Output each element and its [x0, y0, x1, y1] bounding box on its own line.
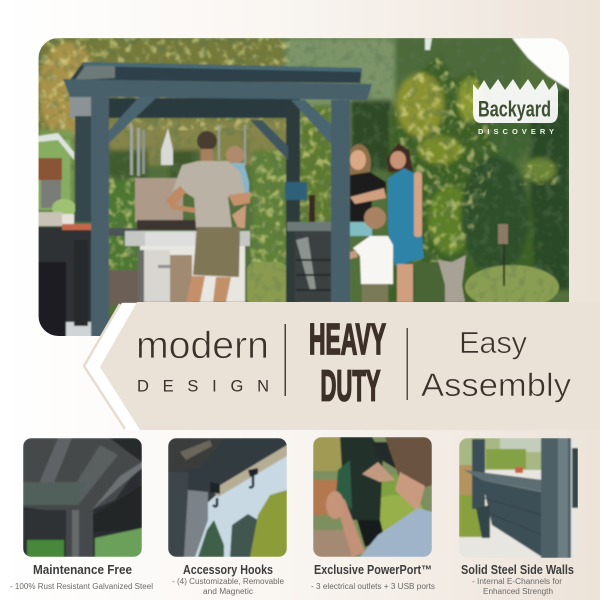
photo: maintenance free roof [23, 438, 142, 557]
chevron outline [84, 303, 140, 430]
divider [284, 324, 286, 396]
caption: accessory hooks: - (4) Customizable, Removable [172, 577, 285, 586]
heavy duty: DUTY [320, 362, 380, 410]
caption: exclusive powerport [311, 563, 435, 591]
woman in blue dress [387, 143, 424, 302]
caption: accessory hooks: Accessory Hooks [183, 563, 273, 577]
outdoor kitchen counter [38, 226, 92, 322]
caption: solid steel side walls: - Internal E-Channels for [472, 577, 562, 586]
easy assembly: Easy [459, 325, 528, 360]
modern design [136, 325, 269, 396]
foliage texture [38, 38, 560, 270]
grill [125, 178, 250, 305]
caption: accessory hooks: and Magnetic [203, 587, 253, 596]
heavy duty [309, 315, 386, 410]
easy assembly: Assembly [421, 367, 571, 403]
hooks [213, 472, 253, 506]
modern design: DESIGN [137, 378, 269, 396]
caption: maintenance free: Maintenance Free [33, 563, 132, 577]
caption: maintenance free: - 100% Rust Resistant Galvanized Steel [10, 582, 153, 591]
divider [406, 328, 408, 400]
background trees [38, 38, 520, 270]
tiki torch [498, 224, 508, 286]
photo: PowerPort [313, 437, 432, 557]
statue [438, 255, 466, 302]
logo: Backyard Discovery [473, 79, 558, 136]
plants and flowers left [38, 140, 70, 210]
lantern and hanging bars [130, 125, 246, 176]
modern design: modern [136, 325, 269, 367]
banner with feature words [84, 302, 600, 430]
man with child [166, 131, 250, 302]
caption: solid steel side walls [461, 563, 574, 596]
boy [348, 206, 394, 302]
sky [512, 38, 570, 90]
conifers [388, 55, 570, 302]
logo: Backyard Discovery: Backyard [478, 96, 551, 122]
caption: maintenance free [10, 563, 153, 591]
caption: solid steel side walls: Enhanced Strength [483, 587, 553, 596]
caption: exclusive powerport: Exclusive PowerPort™ [314, 563, 432, 577]
caption: solid steel side walls: Solid Steel Side Walls [461, 563, 574, 577]
translucent white chevron over photo [119, 302, 137, 308]
easy assembly [421, 325, 571, 403]
photo: accessory hooks [168, 438, 287, 557]
woman in black [347, 144, 386, 236]
caption: exclusive powerport: - 3 electrical outlets + 3 USB ports [311, 582, 435, 591]
pergola structure [63, 62, 372, 337]
caption: accessory hooks [172, 563, 285, 596]
hedges and bushes [246, 261, 560, 302]
main photo: family grilling under pergola [38, 38, 570, 366]
logo: Backyard Discovery: DISCOVERY [478, 127, 554, 136]
photo: solid steel side walls [459, 438, 578, 558]
heavy duty: HEAVY [309, 315, 386, 364]
